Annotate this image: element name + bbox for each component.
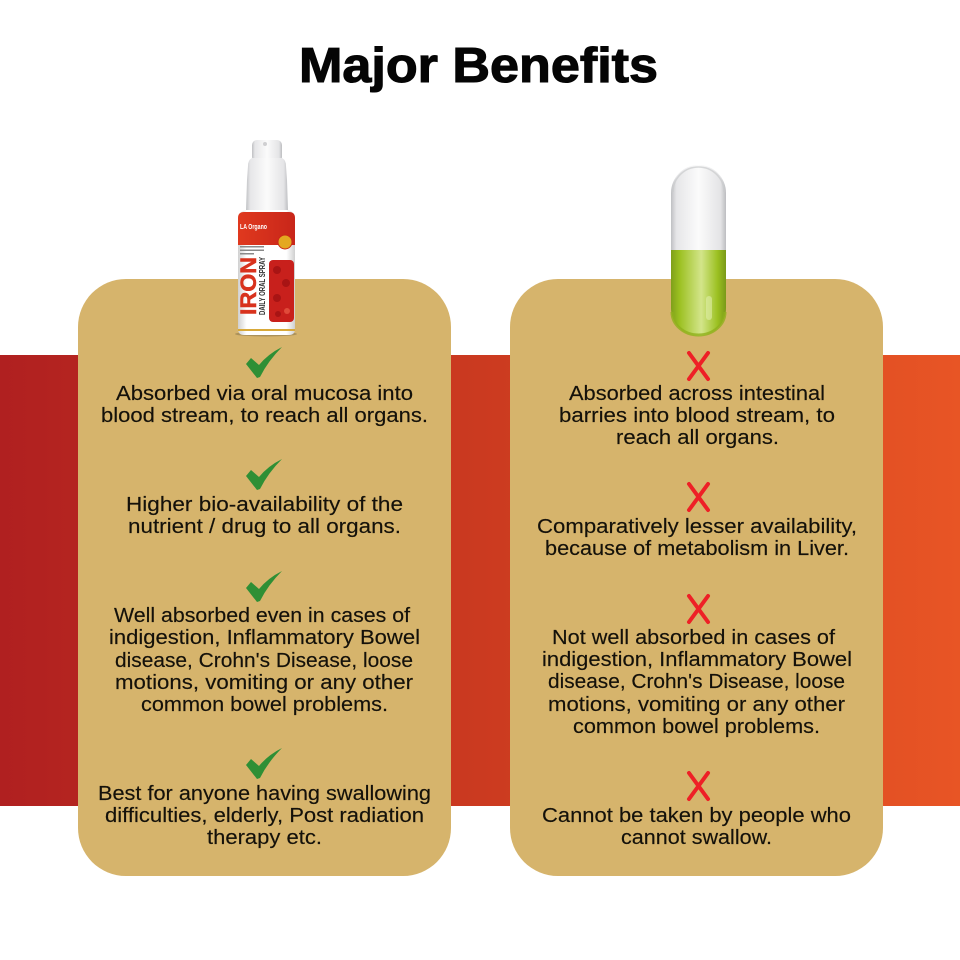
icon: capsule [671,165,726,336]
drawback 3: common bowel problems. [573,715,820,738]
ingredient lines [240,246,264,254]
icon: iron oral spray bottle: DAILY ORAL SPRAY [258,257,267,315]
drawback 4: cannot swallow. [621,826,772,849]
icon: iron oral spray bottle: IRON [236,257,261,315]
drawback 3: Not well absorbed in cases of [552,626,835,649]
drawback 3: disease, Crohn's Disease, loose [548,670,845,693]
panel: capsule drawbacks [510,165,883,876]
benefit 3: Well absorbed even in cases of [114,604,410,627]
drawback 3: motions, vomiting or any other [548,693,845,716]
benefit 3: indigestion, Inflammatory Bowel [109,626,420,649]
drawback 2 [537,484,857,560]
benefit 2: nutrient / drug to all organs. [128,515,401,538]
drawback 4 [542,773,851,849]
background colour band [0,355,960,806]
benefit 4: therapy etc. [207,826,322,849]
icon: iron oral spray bottle [235,140,297,336]
drawback 1: barries into blood stream, to [559,404,835,427]
benefit 4 [98,748,431,849]
drawback 1: Absorbed across intestinal [569,382,825,405]
benefit 3: motions, vomiting or any other [115,671,413,694]
benefit 1 [101,347,428,427]
drawback 1: reach all organs. [616,426,779,449]
benefit 4: difficulties, elderly, Post radiation [105,804,424,827]
benefit 1: blood stream, to reach all organs. [101,404,428,427]
panel: oral spray benefits [78,140,451,876]
benefit 2: Higher bio-availability of the [126,493,403,516]
drawback 1 [559,353,835,449]
benefit 3 [109,571,420,716]
benefit 2 [126,459,403,538]
drawback 2: because of metabolism in Liver. [545,537,849,560]
title: Major Benefits [299,39,658,93]
drawback 2: Comparatively lesser availability, [537,515,857,538]
icon: iron oral spray bottle: LA Organo [240,224,267,231]
drawback 3: indigestion, Inflammatory Bowel [542,648,852,671]
drawback 4: Cannot be taken by people who [542,804,851,827]
benefit 4: Best for anyone having swallowing [98,782,431,805]
benefit 3: common bowel problems. [141,693,388,716]
benefit 3: disease, Crohn's Disease, loose [115,649,413,672]
benefit 1: Absorbed via oral mucosa into [116,382,413,405]
drawback 3 [542,596,852,738]
